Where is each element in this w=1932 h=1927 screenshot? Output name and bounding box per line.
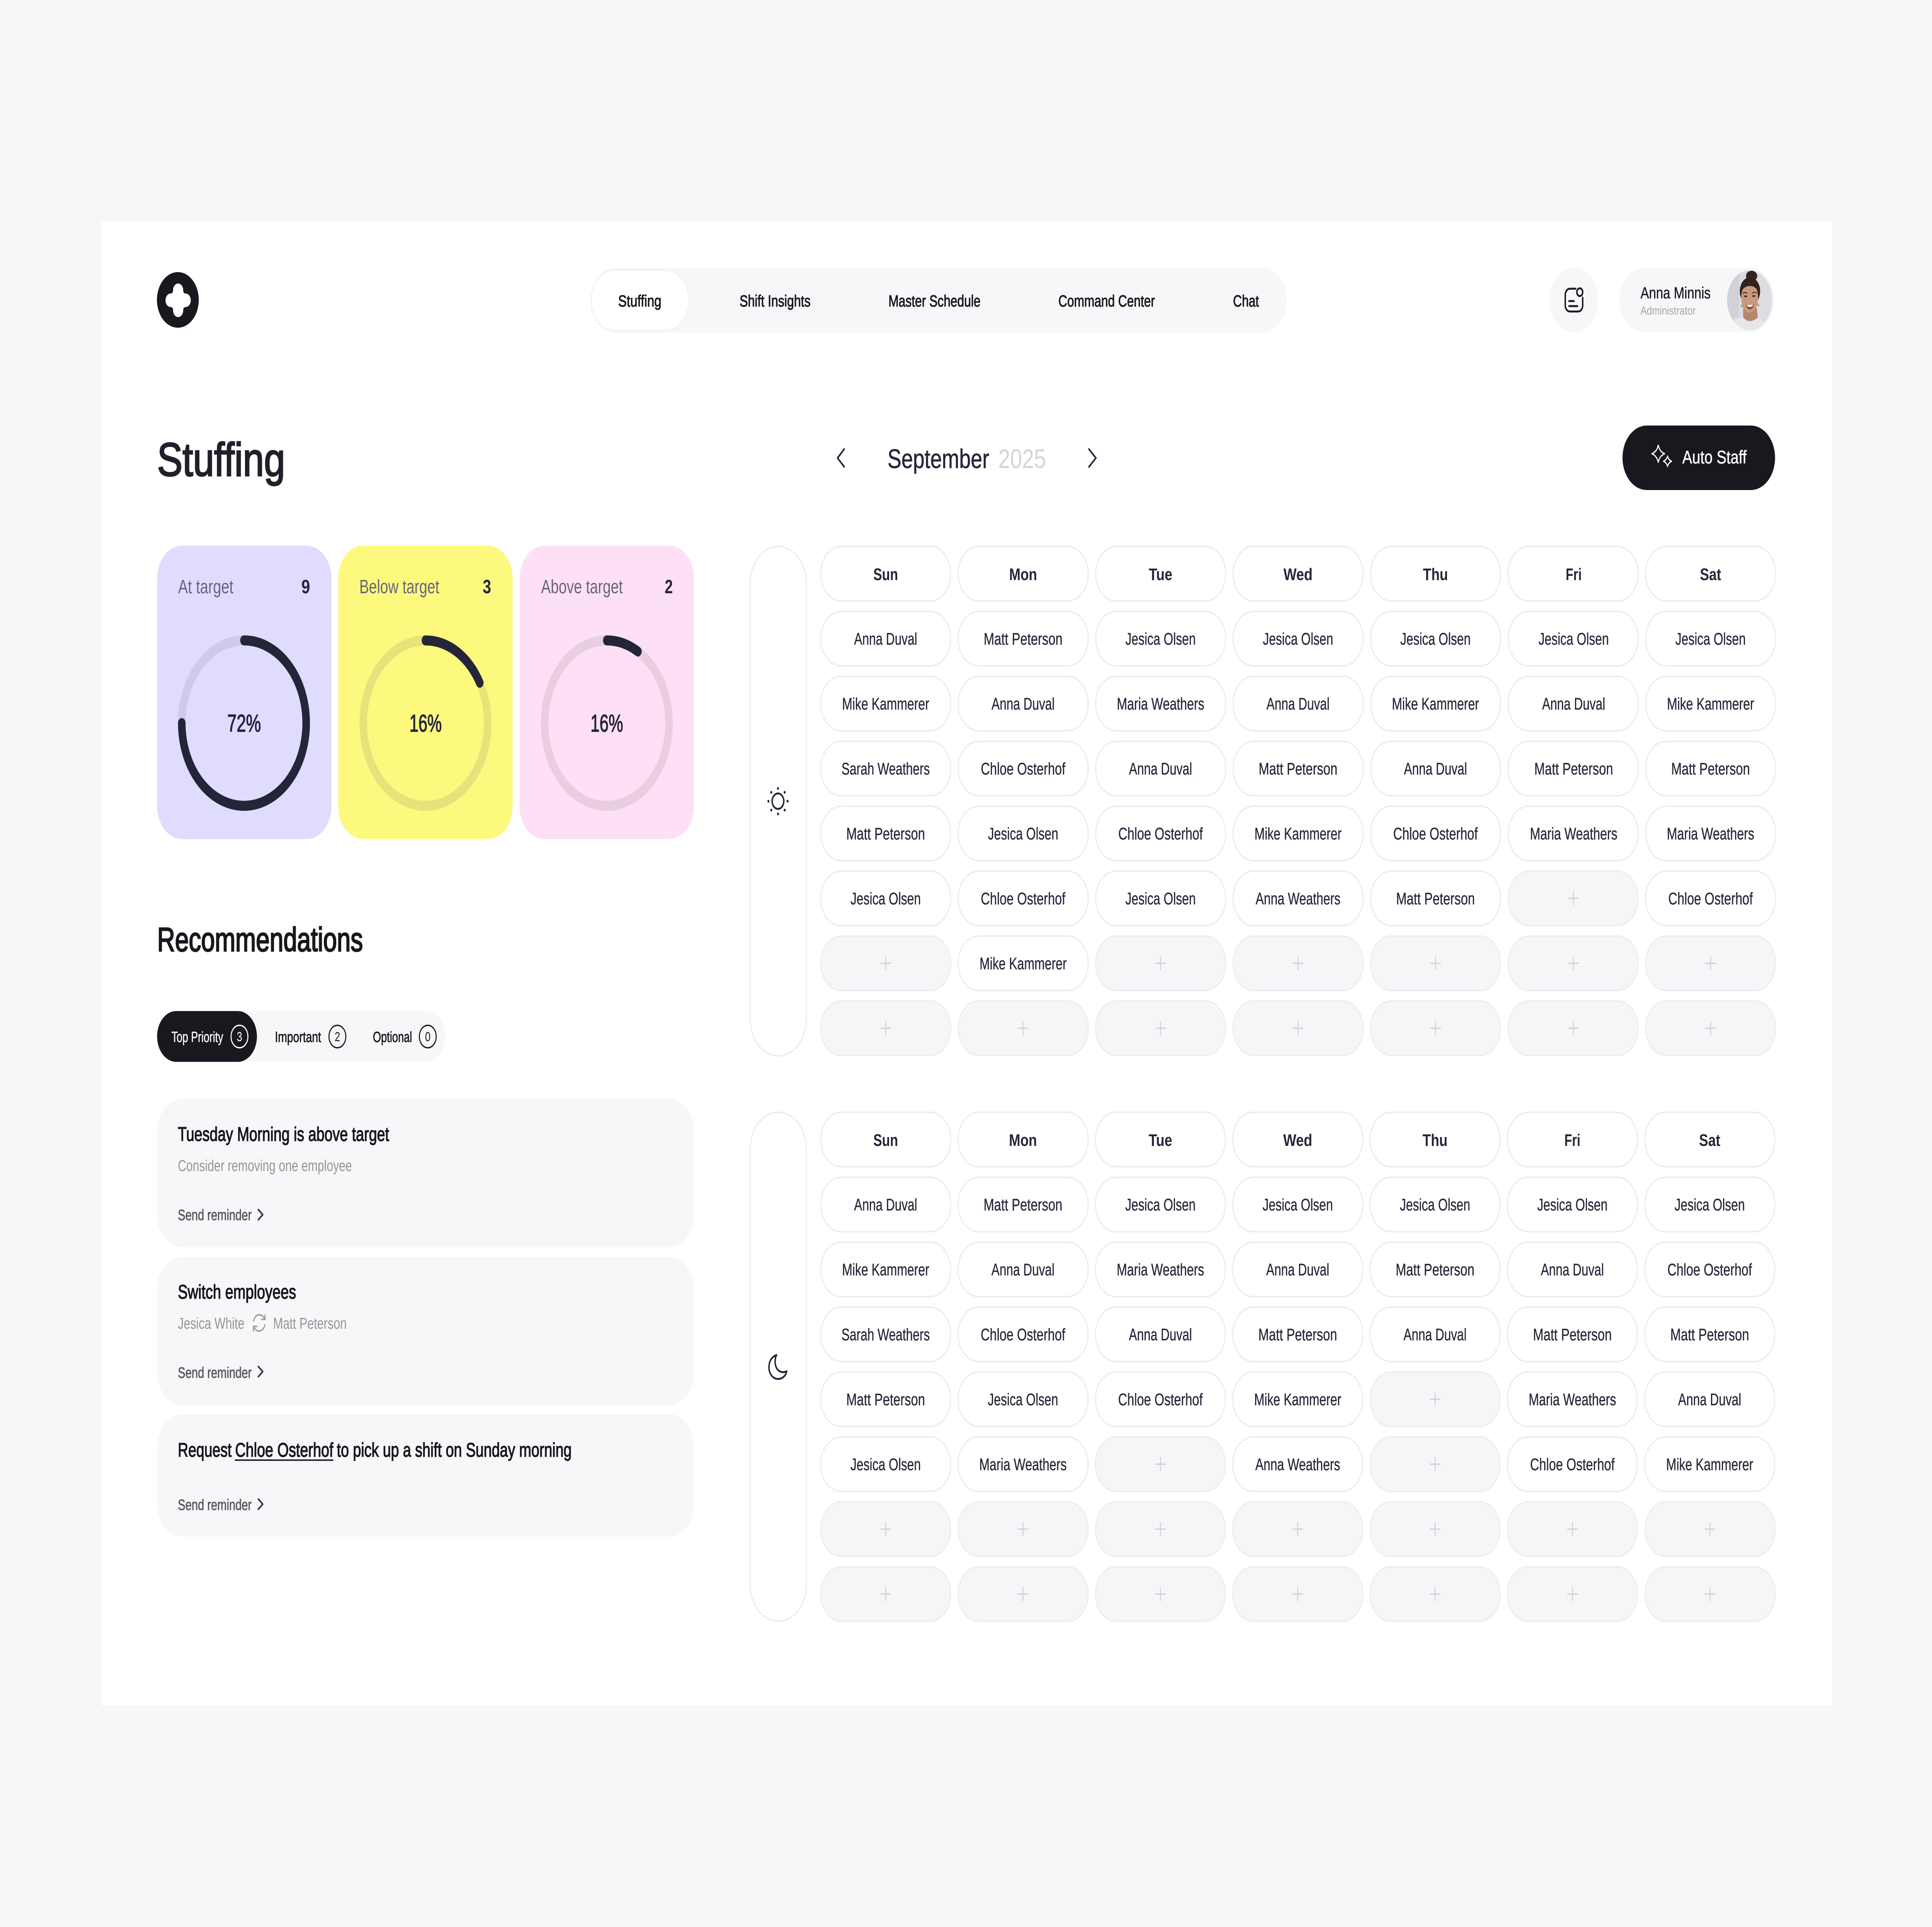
- shift: Jesica Olsen: [1675, 630, 1746, 649]
- empty slot: [1095, 936, 1226, 991]
- empty slot: [1646, 936, 1776, 991]
- empty slot: [1370, 1437, 1500, 1491]
- shift: Jesica Olsen: [1400, 1196, 1470, 1214]
- shift: [821, 1242, 951, 1297]
- empty slot: [1646, 1001, 1776, 1055]
- day Thu: [1371, 546, 1500, 601]
- shift: Chloe Osterhof: [981, 760, 1065, 778]
- recommendation card: switch employees: Switch employees: [178, 1281, 296, 1303]
- empty slot: [1095, 1567, 1225, 1621]
- shift: Anna Duval: [854, 630, 917, 649]
- shift: [958, 806, 1088, 861]
- shift: Matt Peterson: [1396, 1261, 1475, 1279]
- shift: Mike Kammerer: [1254, 825, 1342, 843]
- priority tabs: Top Priority: [172, 1029, 223, 1045]
- profile chip: Anna Minnis: [1641, 284, 1711, 302]
- shift: [1646, 611, 1776, 666]
- shift: [958, 1177, 1088, 1232]
- panel: above target: [520, 546, 694, 839]
- day Tue: [1095, 546, 1226, 601]
- shift: Mike Kammerer: [1254, 1391, 1341, 1409]
- shift: Jesica Olsen: [988, 1391, 1058, 1409]
- shift: Anna Duval: [992, 1261, 1054, 1279]
- title: Stuffing: [157, 433, 285, 486]
- shift: Mike Kammerer: [1667, 695, 1754, 713]
- navigation bar: Chat: [1233, 292, 1259, 310]
- empty slot: [1507, 1502, 1638, 1556]
- shift: Jesica Olsen: [1263, 630, 1333, 649]
- shift: [821, 676, 951, 731]
- empty slot: [1233, 1001, 1363, 1055]
- shift: Matt Peterson: [1259, 1326, 1337, 1344]
- morning rail with sun icon: [750, 546, 806, 1056]
- panel: morning schedule: [750, 546, 1776, 1056]
- empty slot: [1508, 1001, 1638, 1055]
- panel: below target: Below target: [359, 576, 439, 598]
- shift: Matt Peterson: [984, 1196, 1062, 1214]
- shift: Maria Weathers: [1530, 825, 1617, 843]
- empty slot: [958, 1567, 1088, 1621]
- recommendation card: above target: Send reminder: [178, 1207, 252, 1224]
- empty slot: [1233, 936, 1363, 991]
- shift: Matt Peterson: [846, 825, 925, 843]
- day Mon: Mon: [1009, 1131, 1037, 1150]
- panel: at target: [157, 546, 332, 839]
- recommendation card: above target: Tuesday Morning is above target: [178, 1123, 389, 1145]
- day Fri: [1508, 546, 1638, 601]
- shift: [1507, 1242, 1638, 1297]
- empty slot: [1645, 1567, 1775, 1621]
- navigation bar: Command Center: [1058, 292, 1155, 310]
- panel: at target: At target: [178, 576, 233, 598]
- shift: Matt Peterson: [1670, 1326, 1749, 1344]
- panel: above target: 16%: [590, 710, 623, 737]
- shift: [821, 806, 951, 861]
- empty slot: [1507, 1567, 1638, 1621]
- shift: [1233, 1437, 1363, 1491]
- recommendation card: switch employees: Matt Peterson: [273, 1314, 347, 1332]
- shift: [1507, 1177, 1638, 1232]
- shift: [1095, 611, 1226, 666]
- navigation bar: Stuffing: [618, 292, 662, 310]
- shift: Mike Kammerer: [1392, 695, 1479, 713]
- shift: Mike Kammerer: [980, 955, 1067, 973]
- empty slot: [821, 936, 951, 991]
- empty slot: [1508, 871, 1638, 926]
- shift: Chloe Osterhof: [1118, 825, 1203, 843]
- shift: [1507, 1307, 1638, 1362]
- shift: [821, 741, 951, 796]
- shift: Maria Weathers: [1117, 1261, 1204, 1279]
- recommendation card: request pickup: Chloe Osterhof: [235, 1439, 333, 1461]
- empty slot: [1233, 1502, 1363, 1556]
- shift: Chloe Osterhof: [1393, 825, 1478, 843]
- day Wed: [1233, 546, 1363, 601]
- profile chip: [1640, 270, 1772, 330]
- recommendation card: switch employees: [157, 1257, 694, 1405]
- shift: Chloe Osterhof: [1530, 1455, 1615, 1474]
- shift: [958, 741, 1088, 796]
- shift: [821, 1307, 951, 1362]
- panel: below target: 16%: [410, 710, 442, 737]
- day Fri: Fri: [1566, 565, 1582, 584]
- shift: Jesica Olsen: [850, 1455, 921, 1474]
- priority tabs: 3: [237, 1030, 242, 1044]
- shift: Matt Peterson: [1533, 1326, 1612, 1344]
- shift: [1233, 871, 1363, 926]
- shift: [821, 871, 951, 926]
- shift: Jesica Olsen: [1400, 630, 1471, 649]
- shift: [1507, 1437, 1638, 1491]
- shift: [1095, 676, 1226, 731]
- shift: Chloe Osterhof: [1118, 1391, 1203, 1409]
- shift: [958, 1242, 1088, 1297]
- shift: Mike Kammerer: [1666, 1455, 1753, 1474]
- auto staff button: [1622, 426, 1775, 490]
- shift: Anna Duval: [854, 1196, 917, 1214]
- panel: below target: [338, 546, 513, 839]
- panel: at target: 9: [301, 576, 310, 598]
- panel: below target: 3: [483, 576, 491, 598]
- empty slot: [1508, 936, 1638, 991]
- priority tabs: Optional: [373, 1029, 412, 1045]
- shift: Matt Peterson: [1259, 760, 1337, 778]
- shift: Jesica Olsen: [1126, 630, 1196, 649]
- shift: Chloe Osterhof: [981, 1326, 1065, 1344]
- recommendation card: request pickup: Request: [178, 1439, 232, 1461]
- day Fri: Fri: [1565, 1131, 1580, 1150]
- shift: Anna Duval: [1267, 695, 1330, 713]
- shift: [1371, 806, 1500, 861]
- shift: Mike Kammerer: [842, 695, 929, 713]
- shift: Jesica Olsen: [1263, 1196, 1333, 1214]
- shift: Anna Duval: [992, 695, 1054, 713]
- month selector: 2025: [998, 444, 1046, 474]
- shift: Jesica Olsen: [850, 890, 921, 908]
- panel: at target: 72%: [227, 710, 261, 737]
- day Wed: Wed: [1283, 1131, 1312, 1150]
- empty slot: [1371, 1001, 1500, 1055]
- profile chip: Administrator: [1641, 304, 1696, 317]
- shift: [1095, 741, 1226, 796]
- shift: Jesica Olsen: [1539, 630, 1609, 649]
- shift: Maria Weathers: [1529, 1391, 1616, 1409]
- heading: recommendations: Recommendations: [157, 921, 363, 958]
- shift: [1507, 1372, 1638, 1427]
- shift: [958, 1437, 1088, 1491]
- shift: [1371, 871, 1500, 926]
- recommendation card: above target: [157, 1099, 694, 1247]
- shift: [958, 1372, 1088, 1427]
- shift: [1233, 741, 1363, 796]
- shift: [1371, 741, 1500, 796]
- shift: [1233, 1307, 1363, 1362]
- shift: Jesica Olsen: [1125, 1196, 1196, 1214]
- empty slot: [1095, 1502, 1225, 1556]
- shift: [958, 936, 1088, 991]
- shift: [1370, 1307, 1500, 1362]
- shift: [1233, 1242, 1363, 1297]
- day Thu: Thu: [1423, 1131, 1447, 1150]
- day Mon: Mon: [1009, 565, 1037, 584]
- shift: Chloe Osterhof: [1668, 890, 1753, 908]
- shift: [1233, 806, 1363, 861]
- day Sun: [821, 546, 951, 601]
- shift: [958, 871, 1088, 926]
- day Tue: Tue: [1149, 565, 1172, 584]
- empty slot: [1233, 1567, 1363, 1621]
- priority tabs: [157, 1011, 446, 1062]
- shift: [1508, 741, 1638, 796]
- shift: [958, 1307, 1088, 1362]
- shift: [1095, 871, 1226, 926]
- shift: Sarah Weathers: [842, 1326, 930, 1344]
- recommendation card: request pickup: Send reminder: [178, 1497, 252, 1513]
- empty slot: [821, 1001, 951, 1055]
- day Sat: [1645, 1112, 1775, 1167]
- shift: Sarah Weathers: [842, 760, 930, 778]
- shift: Anna Weathers: [1255, 890, 1340, 908]
- shift: [1645, 1177, 1775, 1232]
- shift: [1646, 806, 1776, 861]
- shift: Anna Duval: [1129, 760, 1192, 778]
- shift: Maria Weathers: [979, 1455, 1067, 1474]
- day Thu: [1370, 1112, 1500, 1167]
- shift: [821, 611, 951, 666]
- shift: [1370, 1177, 1500, 1232]
- shift: Anna Duval: [1678, 1391, 1741, 1409]
- day Sat: [1646, 546, 1776, 601]
- empty slot: [1371, 936, 1500, 991]
- shift: Anna Duval: [1541, 1261, 1604, 1279]
- day Wed: Wed: [1284, 565, 1313, 584]
- priority tabs: 0: [425, 1030, 430, 1044]
- empty slot: [1095, 1437, 1225, 1491]
- shift: Jesica Olsen: [1126, 890, 1196, 908]
- shift: Jesica Olsen: [988, 825, 1058, 843]
- shift: [1645, 1437, 1775, 1491]
- icon: logo: [157, 272, 199, 328]
- day Thu: Thu: [1423, 565, 1448, 584]
- shift: [1370, 1242, 1500, 1297]
- shift: [1095, 1307, 1225, 1362]
- shift: [1508, 676, 1638, 731]
- day Sun: Sun: [873, 565, 898, 584]
- panel: above target: 2: [665, 576, 673, 598]
- shift: [1645, 1307, 1775, 1362]
- recommendation card: switch employees: Jesica White: [178, 1314, 245, 1332]
- navigation bar: Shift Insights: [740, 292, 811, 310]
- priority tabs: 2: [335, 1030, 340, 1044]
- shift: [1095, 1242, 1225, 1297]
- day Mon: [958, 546, 1088, 601]
- shift: [1645, 1372, 1775, 1427]
- shift: Anna Duval: [1403, 1326, 1467, 1344]
- notification button: [1549, 267, 1598, 332]
- night rail with moon icon: [750, 1112, 806, 1621]
- recommendation card: switch employees: Send reminder: [178, 1365, 252, 1381]
- shift: Anna Weathers: [1255, 1455, 1340, 1474]
- shift: [1233, 1372, 1363, 1427]
- day Sat: Sat: [1700, 565, 1721, 584]
- empty slot: [1370, 1567, 1500, 1621]
- shift: Anna Duval: [1129, 1326, 1192, 1344]
- empty slot: [1370, 1372, 1500, 1427]
- shift: Maria Weathers: [1667, 825, 1754, 843]
- recommendation card: request pickup: to pick up a shift on Sunday morning: [337, 1439, 571, 1461]
- shift: Maria Weathers: [1117, 695, 1204, 713]
- shift: Matt Peterson: [1671, 760, 1750, 778]
- shift: Matt Peterson: [1534, 760, 1613, 778]
- day Sun: Sun: [873, 1131, 898, 1150]
- shift: [1233, 676, 1363, 731]
- day Wed: [1233, 1112, 1363, 1167]
- empty slot: [1645, 1502, 1775, 1556]
- recommendation card: request pickup: [157, 1414, 694, 1537]
- shift: [821, 1437, 951, 1491]
- shift: [1646, 741, 1776, 796]
- shift: Jesica Olsen: [1675, 1196, 1745, 1214]
- shift: Chloe Osterhof: [981, 890, 1065, 908]
- shift: [821, 1372, 951, 1427]
- recommendation card: above target: Consider removing one employee: [178, 1157, 352, 1175]
- shift: [1233, 1177, 1363, 1232]
- shift: [821, 1177, 951, 1232]
- shift: Chloe Osterhof: [1667, 1261, 1752, 1279]
- navigation bar: [590, 268, 1287, 333]
- shift: [1508, 806, 1638, 861]
- empty slot: [1095, 1001, 1226, 1055]
- shift: [958, 676, 1088, 731]
- priority tabs: Important: [275, 1029, 321, 1045]
- shift: [958, 611, 1088, 666]
- shift: [1095, 806, 1226, 861]
- shift: Anna Duval: [1404, 760, 1467, 778]
- month selector: [838, 444, 1096, 474]
- empty slot: [821, 1502, 951, 1556]
- empty slot: [1370, 1502, 1500, 1556]
- shift: Mike Kammerer: [842, 1261, 929, 1279]
- shift: [1646, 676, 1776, 731]
- shift: [1095, 1177, 1225, 1232]
- panel: night schedule: [750, 1112, 1775, 1621]
- day Sat: Sat: [1699, 1131, 1720, 1150]
- month selector: September: [888, 444, 989, 474]
- day Fri: [1507, 1112, 1638, 1167]
- empty slot: [821, 1567, 951, 1621]
- auto staff button: Auto Staff: [1682, 447, 1747, 467]
- day Sun: [821, 1112, 951, 1167]
- shift: Jesica Olsen: [1537, 1196, 1607, 1214]
- shift: Anna Duval: [1266, 1261, 1329, 1279]
- shift: [1371, 611, 1500, 666]
- panel: above target: Above target: [541, 576, 623, 598]
- shift: [1233, 611, 1363, 666]
- shift: Anna Duval: [1542, 695, 1605, 713]
- shift: [1371, 676, 1500, 731]
- empty slot: [958, 1001, 1088, 1055]
- shift: Matt Peterson: [846, 1391, 925, 1409]
- panel: dashboard: [101, 221, 1832, 1706]
- day Tue: [1095, 1112, 1225, 1167]
- shift: [1646, 871, 1776, 926]
- day Mon: [958, 1112, 1088, 1167]
- navigation bar: Master Schedule: [888, 292, 981, 310]
- day Tue: Tue: [1149, 1131, 1172, 1150]
- shift: [1508, 611, 1638, 666]
- shift: [1645, 1242, 1775, 1297]
- empty slot: [958, 1502, 1088, 1556]
- shift: Matt Peterson: [984, 630, 1063, 649]
- shift: [1095, 1372, 1225, 1427]
- shift: Matt Peterson: [1396, 890, 1475, 908]
